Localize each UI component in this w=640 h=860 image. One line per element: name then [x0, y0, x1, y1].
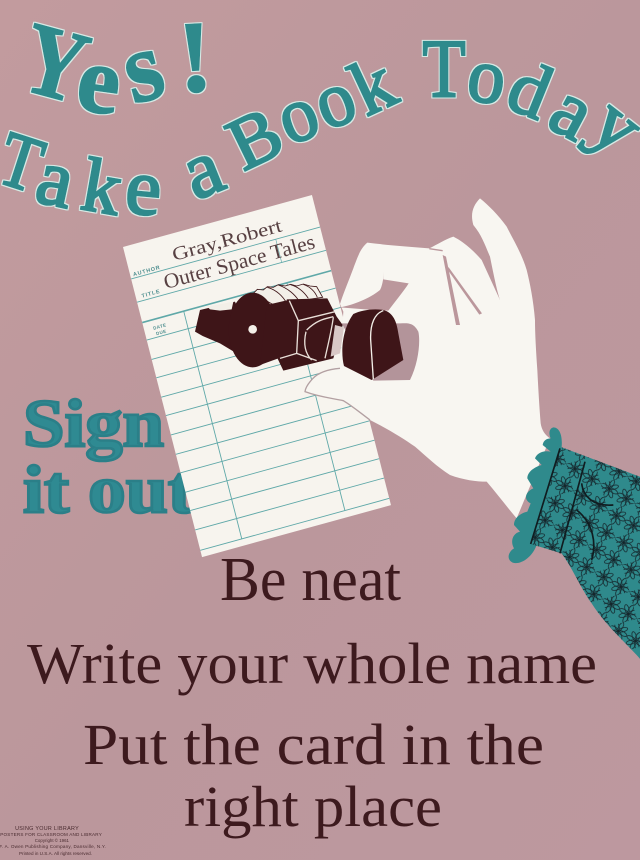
heading: Sign it out — [23, 385, 193, 527]
title: Yes! — [10, 0, 215, 136]
Write your whole name: Write your whole name — [27, 631, 597, 696]
title: Take a Book Today: k — [76, 142, 128, 232]
title: Take a Book Today: a — [169, 122, 235, 217]
title: Take a Book Today: e — [122, 143, 165, 233]
stamp — [195, 284, 403, 380]
publisher credit: POSTERS FOR CLASSROOM AND LIBRARY — [0, 832, 102, 837]
title: Take a Book Today: a — [536, 64, 609, 158]
publisher credit: F. A. Owen Publishing Company, Dansville, N.Y. — [0, 844, 106, 849]
publisher credit: Copyright © 1961 — [35, 838, 70, 843]
date wheels — [253, 284, 323, 307]
title: Take a Book Today: o — [302, 53, 367, 147]
title: Yes!: s — [110, 9, 175, 126]
card labels: TITLE — [141, 289, 161, 300]
card rule lines — [131, 227, 389, 550]
ruffled cuff — [509, 427, 562, 563]
right place: right place — [184, 774, 442, 839]
stamp handle — [342, 309, 403, 380]
typed author and title — [156, 208, 317, 294]
stamp body left — [195, 302, 247, 353]
title: Yes!: e — [71, 24, 128, 136]
library card — [123, 195, 391, 557]
heading: Sign it out: it out — [23, 451, 193, 527]
typed author and title: Gray,Robert — [170, 215, 285, 266]
sleeve fabric — [531, 447, 640, 661]
Be neat: Be neat — [220, 546, 401, 614]
title: Take a Book Today — [0, 22, 640, 233]
title: Take a Book Today: d — [497, 44, 563, 136]
sleeve — [509, 427, 640, 661]
title: Take a Book Today: B — [215, 91, 295, 187]
hand — [305, 198, 550, 518]
thumb outline — [305, 368, 370, 420]
title: Yes!: Y — [10, 1, 100, 126]
publisher credit — [0, 826, 106, 856]
card labels — [133, 265, 177, 338]
cuff band lines — [531, 448, 613, 560]
hand silhouette — [305, 198, 550, 518]
stamp frame — [277, 298, 343, 371]
card labels: AUTHOR — [133, 265, 161, 278]
publisher credit: Printed in U.S.A. All rights reserved. — [19, 851, 92, 856]
title: Take a Book Today: o — [265, 68, 330, 162]
card labels: DATE — [153, 322, 167, 331]
heading: Sign it out: Sign — [23, 385, 164, 461]
stamp disc — [229, 293, 277, 367]
title: Take a Book Today: T — [422, 22, 466, 114]
finger crease lines — [443, 255, 460, 325]
shadow between fingers and behind stamp — [340, 272, 409, 311]
instructions — [27, 546, 597, 839]
stamp neck — [331, 325, 344, 357]
title: Take a Book Today: k — [338, 40, 408, 132]
card labels: DUE — [156, 329, 167, 336]
publisher credit: USING YOUR LIBRARY — [15, 826, 79, 832]
Put the card in the: Put the card in the — [83, 712, 544, 777]
connector between disc and frame — [260, 300, 298, 365]
title: Yes!: ! — [175, 0, 215, 115]
title: Take a Book Today: o — [463, 31, 511, 122]
typed author and title: Outer Space Tales — [161, 229, 317, 294]
title: Take a Book Today: a — [29, 132, 82, 226]
